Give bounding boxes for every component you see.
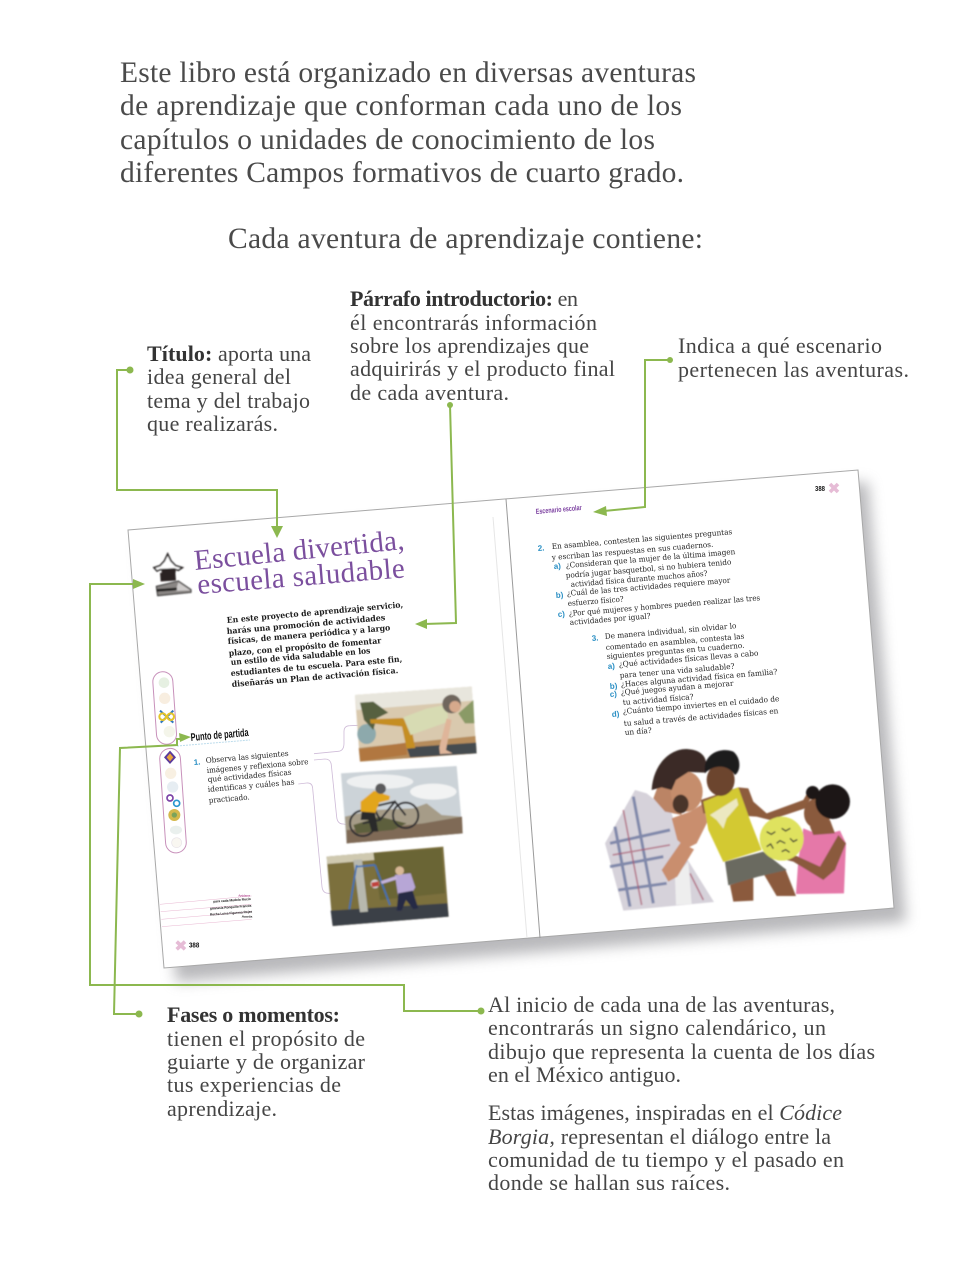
callout: título: Título: aporta una — [147, 341, 311, 366]
callout: párrafo introductorio: de cada aventura. — [350, 380, 509, 405]
question 2: En asamblea, contesten las siguientes preguntas — [551, 527, 733, 551]
callout: título: tema y del trabajo — [147, 388, 310, 413]
question 3: tu salud a través de actividades físicas en — [623, 706, 779, 728]
photo: man with bicycle — [341, 766, 463, 843]
intro paragraph: diferentes Campos formativos de cuarto grado. — [120, 157, 684, 189]
question 2: ¿Cuál de las tres actividades requiere mayor — [566, 576, 731, 598]
callout: párrafo introductorio — [350, 286, 615, 405]
callout: códice Borgia: donde se hallan sus raíces. — [488, 1170, 730, 1195]
intro paragraph in the book: diseñarás un Plan de activación física. — [231, 665, 399, 689]
step 1 text: qué actividades físicas — [207, 768, 292, 784]
question 2: b) — [555, 590, 564, 600]
callout: título — [147, 341, 311, 436]
intro paragraph: capítulos o unidades de conocimiento de los — [120, 124, 655, 156]
credits table: Ayúdame — [238, 893, 251, 897]
callout: códice Borgia — [488, 1100, 844, 1195]
subheading: Cada aventura de aprendizaje contiene: — [228, 223, 703, 255]
step 1 text: identificas y cuáles has — [207, 777, 295, 794]
credits table: para cada Modelo Rocío — [213, 897, 251, 904]
callout: título: que realizarás. — [147, 411, 278, 436]
step 1 text: imágenes y reflexiona sobre — [206, 757, 309, 775]
intro paragraph — [120, 57, 696, 189]
icon: page ornament left — [177, 942, 185, 949]
question 3: tu actividad física? — [622, 692, 694, 707]
icon: calendar sign — [154, 554, 191, 596]
callout: escenario: pertenecen las aventuras. — [678, 357, 909, 382]
arrow: párrafo — [415, 402, 456, 629]
callout: fases o momentos: tienen el propósito de — [167, 1026, 365, 1051]
photo: woman exercising — [355, 687, 477, 762]
left margin pills, credits and photos (local coordinates) — [152, 671, 477, 949]
step 1 text: Observa las siguientes — [205, 749, 289, 765]
scenario label: Escenario escolar — [535, 503, 582, 516]
question 3: ¿Cuánto tiempo inviertes en el cuidado de — [622, 694, 780, 716]
question 3: siguientes preguntas en tu cuaderno. — [606, 641, 745, 661]
icon: page ornament right — [830, 484, 838, 492]
callout: signo calendárico: dibujo que representa la cuenta de los días — [488, 1039, 875, 1064]
girl with yellow top — [701, 750, 813, 902]
photo: adult and two girls with ball — [605, 749, 850, 911]
step heading: punto de partida: Punto de partida — [190, 727, 250, 744]
question 2: actividades por igual? — [569, 611, 651, 627]
callout: fases o momentos: guiarte y de organizar — [167, 1049, 366, 1074]
callout: signo calendárico: en el México antiguo. — [488, 1062, 681, 1087]
ball — [760, 817, 804, 861]
callout: signo calendárico: Al inicio de cada una de las aventuras, — [488, 992, 835, 1017]
callout: fases o momentos: Fases o momentos: — [167, 1002, 340, 1027]
title — [193, 524, 406, 601]
intro paragraph in the book: físicas, de manera periódica y a largo — [227, 622, 391, 646]
title: Escuela divertida, — [193, 524, 406, 577]
pill: fases superiores — [152, 671, 177, 745]
question 2: ¿Consideran que la mujer de la última imagen — [565, 547, 736, 570]
question 2: c) — [557, 609, 566, 619]
credits table: Ayuda — [242, 915, 253, 919]
title: escuela saludable — [196, 552, 406, 601]
question 3 — [591, 621, 780, 737]
callout: códice Borgia: comunidad de tu tiempo y el pasado en — [488, 1147, 844, 1172]
step heading: punto de partida — [177, 727, 250, 746]
credits table: gimnasia Ronquillo Francés — [210, 904, 252, 911]
intro paragraph in the book: En este proyecto de aprendizaje servicio, — [226, 599, 404, 625]
question 3: ¿Haces alguna actividad física en familia? — [620, 667, 778, 689]
step 1 text: 1. — [193, 757, 201, 767]
spine — [493, 499, 540, 938]
callout: párrafo introductorio: él encontrarás información — [350, 310, 597, 335]
intro paragraph in the book: harás una promoción de actividades — [226, 612, 386, 636]
question 3: b) — [609, 681, 618, 691]
question 2: esfuerzo físico? — [567, 594, 624, 608]
question 3: a) — [607, 661, 616, 671]
pill: fases inferiores — [159, 748, 187, 854]
page sheet — [128, 470, 894, 968]
question 2: ¿Por qué mujeres y hombres pueden realizar las tres — [568, 593, 761, 618]
intro paragraph in the book: un estilo de vida saludable en los — [230, 645, 371, 667]
callout: fases o momentos: tus experiencias de — [167, 1072, 341, 1097]
callout: códice Borgia: Borgia, representan el diálogo entre la — [488, 1124, 831, 1149]
question 3: un día? — [624, 726, 652, 737]
book spread — [128, 470, 906, 982]
question 2: a) — [553, 561, 562, 571]
step 1 text: practicado. — [208, 792, 250, 805]
intro paragraph: de aprendizaje que conforman cada uno de los — [120, 90, 682, 122]
arrow: signo calendárico — [90, 579, 484, 1014]
callout: título: idea general del — [147, 364, 291, 389]
callout: escenario — [678, 333, 909, 382]
intro paragraph: Este libro está organizado en diversas aventuras — [120, 57, 696, 89]
callout: escenario: Indica a qué escenario — [678, 333, 882, 358]
callout: fases o momentos — [167, 1002, 366, 1121]
callout: signo calendárico — [488, 992, 875, 1087]
man — [605, 749, 714, 911]
question 3: De manera individual, sin olvidar lo — [604, 621, 737, 641]
photo: woman with ball — [327, 847, 449, 926]
intro paragraph in the book: estudiantes de tu escuela. Para este fin, — [230, 654, 403, 678]
arrow: título — [117, 366, 283, 538]
question 2: podría jugar basquetbol, si no hubiera tenido — [565, 557, 732, 580]
question 3: ¿Qué actividades físicas llevas a cabo — [618, 649, 759, 669]
arrow: fases — [114, 733, 191, 1018]
arrow: escenario — [593, 357, 673, 516]
question 3: ¿Qué juegos ayudan a mejorar — [620, 679, 734, 697]
question 3: comentado en asamblea, contesta las — [605, 632, 745, 652]
callout: párrafo introductorio: Párrafo introductorio: en — [350, 286, 578, 311]
intro paragraph in the book: plazo, con el propósito de fomentar — [228, 635, 382, 658]
question 2: y escriban las respuestas en sus cuadernos. — [550, 540, 714, 562]
credits table: Rocha Luisa Figueroa Rojas — [210, 910, 252, 917]
question 3: c) — [609, 689, 618, 699]
question 2: 2. — [537, 543, 545, 553]
girl with pink top — [770, 784, 850, 894]
question 3: para tener una vida saludable? — [619, 662, 735, 680]
credits table — [160, 893, 253, 927]
question 3: 3. — [591, 633, 599, 643]
callout: fases o momentos: aprendizaje. — [167, 1096, 277, 1121]
connector lines — [298, 725, 358, 893]
callout: signo calendárico: encontrarás un signo calendárico, un — [488, 1015, 826, 1040]
step 1 text — [193, 749, 309, 805]
callout: párrafo introductorio: sobre los aprendizajes que — [350, 333, 589, 358]
question 2: actividad física durante muchos años? — [570, 569, 708, 589]
page number left: 388 — [189, 942, 199, 949]
intro paragraph in the book — [226, 599, 404, 689]
question 3: d) — [611, 709, 620, 719]
page shadow — [140, 482, 906, 982]
callout: códice Borgia: Estas imágenes, inspiradas en el Códice — [488, 1100, 842, 1125]
callout: párrafo introductorio: adquirirás y el producto final — [350, 356, 615, 381]
question 2 — [537, 527, 761, 627]
page number right: 388 — [815, 486, 825, 493]
